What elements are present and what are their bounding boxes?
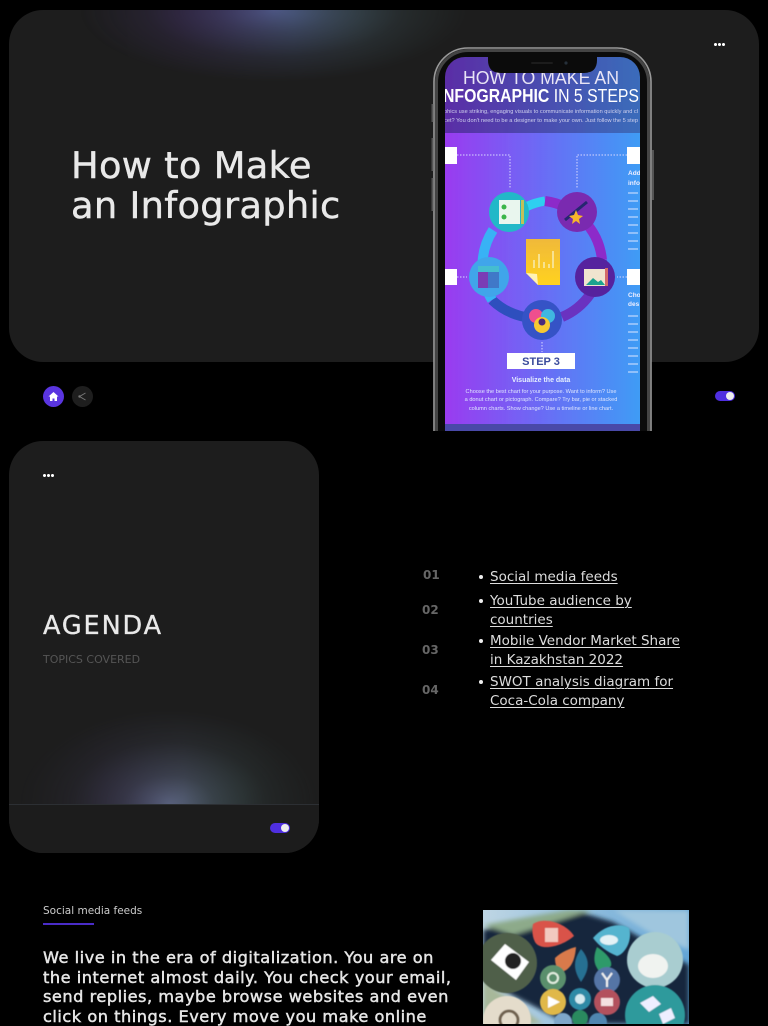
- agenda numbers: 02: [422, 603, 439, 617]
- icon: share button: [72, 386, 93, 407]
- step icons: [489, 192, 529, 232]
- accent rule: [43, 923, 94, 925]
- item 2: [479, 593, 632, 628]
- step ring: [482, 201, 602, 317]
- agenda numbers: 03: [422, 643, 439, 657]
- agenda footer: [9, 804, 319, 854]
- dotted connectors: [457, 155, 627, 352]
- item 4: SWOT analysis diagram for: [490, 674, 673, 690]
- center document: [526, 239, 560, 285]
- item 4: [479, 674, 674, 708]
- phone notch: [488, 56, 597, 73]
- item 4: Coca-Cola company: [490, 692, 624, 708]
- phone screen: STEP 3: [522, 356, 560, 368]
- side step text: Add: [628, 170, 641, 177]
- item 2: YouTube audience by: [490, 593, 632, 609]
- agenda heading: AGENDA: [43, 611, 163, 641]
- agenda subheading: TOPICS COVERED: [43, 653, 140, 666]
- phone screen: Visualize the data: [512, 377, 570, 384]
- phone body: [432, 48, 654, 468]
- agenda numbers: 04: [422, 683, 439, 697]
- icon: home button: [43, 386, 64, 407]
- item 2: countries: [490, 612, 553, 628]
- phone screen: NFOGRAPHIC IN 5 STEPS: [443, 85, 639, 106]
- phone mockup: [432, 47, 654, 431]
- item 3: Mobile Vendor Market Share: [490, 633, 680, 649]
- toggle: agenda: [270, 823, 290, 833]
- panel: hero: [9, 10, 759, 362]
- panel: agenda: [9, 441, 319, 853]
- image: social media apps: [483, 910, 689, 1024]
- icon: hero menu dots: [714, 43, 725, 46]
- phone screen: cet? You don't need to be a designer to make your own. Just follow the 5 step: [444, 118, 638, 124]
- step label: [507, 353, 575, 369]
- body text: the internet almost daily. You check your email,: [43, 968, 452, 986]
- side step text: info: [628, 180, 640, 187]
- toggle: hero: [715, 391, 735, 401]
- item 3: [479, 633, 680, 668]
- blurred phone background: [483, 910, 689, 1024]
- side step text: des: [628, 301, 640, 308]
- title: [71, 144, 341, 227]
- body text: [43, 948, 452, 1026]
- app bubbles: [477, 921, 685, 1026]
- icon: agenda menu dots: [43, 474, 54, 477]
- title: an Infographic: [71, 184, 341, 227]
- hero glow: [118, 10, 427, 72]
- phone screen: a donut chart or pictograph. Compare? Try bar, pie or stacked: [465, 397, 617, 403]
- phone screen: column charts. Show change? Use a timeline or line chart.: [469, 406, 614, 412]
- section label: Social media feeds: [43, 905, 142, 917]
- step tabs: [445, 147, 640, 285]
- body text: send replies, maybe browse websites and even: [43, 987, 449, 1006]
- side step text: [628, 170, 641, 308]
- body text: click on things. Every move you make online: [43, 1006, 427, 1026]
- phone screen: Choose the best chart for your purpose. Want to inform? Use: [466, 389, 616, 395]
- item 3: in Kazakhstan 2022: [490, 652, 623, 668]
- agenda list: [479, 569, 680, 708]
- agenda glow: [67, 728, 272, 804]
- phone screen: [443, 57, 641, 434]
- body text: We live in the era of digitalization. You are on: [43, 948, 434, 967]
- title: How to Make: [71, 144, 312, 187]
- item 1: Social media feeds: [490, 569, 618, 585]
- screen heading: HOW TO MAKE AN: [463, 67, 619, 88]
- agenda numbers: 01: [423, 568, 440, 582]
- side step text: Cho: [628, 292, 641, 299]
- phone screen: phics use striking, engaging visuals to communicate information quickly and cl: [444, 109, 638, 115]
- agenda numbers: [422, 568, 440, 697]
